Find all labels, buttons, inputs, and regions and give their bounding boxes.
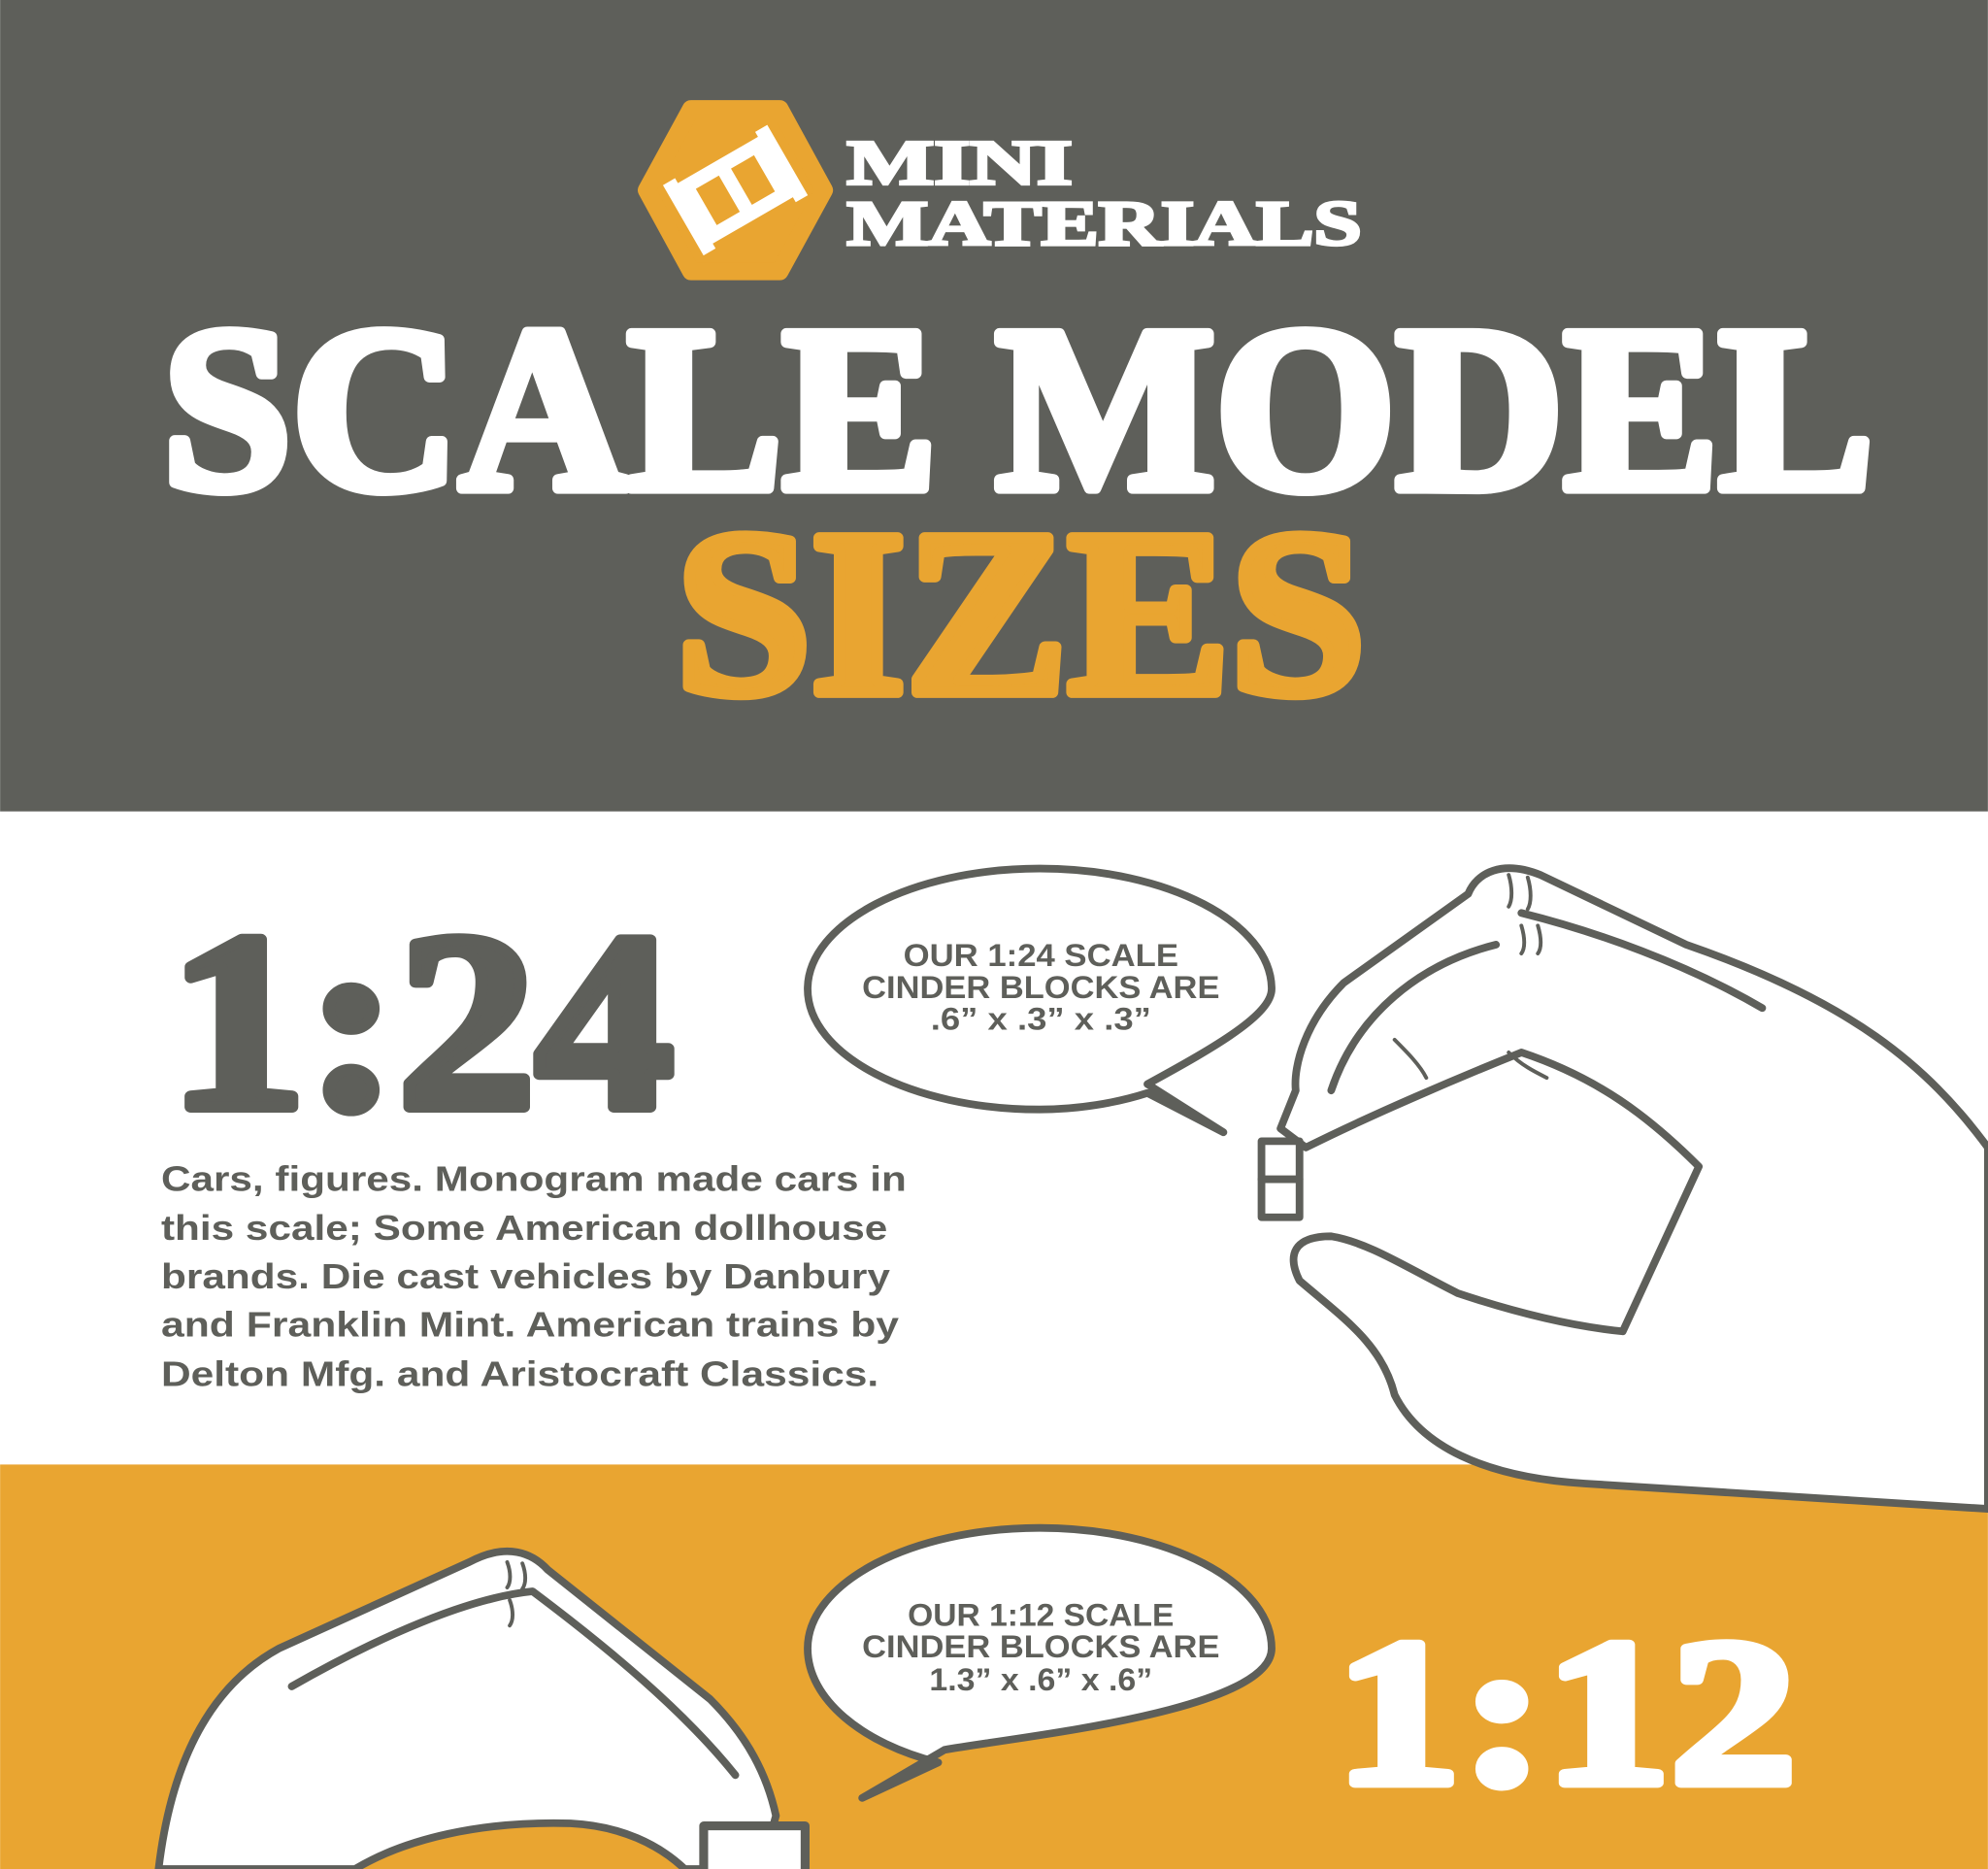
logo text: MINI <box>847 128 1073 198</box>
header background <box>0 0 1988 812</box>
hand: 1:24 <box>1262 868 1988 1509</box>
description 1:24: brands. Die cast vehicles by Danbury <box>161 1256 891 1296</box>
callout bubble 1:24: .6” x .3” x .3” <box>931 1000 1151 1036</box>
hand: 1:12 <box>158 1552 805 1869</box>
description 1:24: Delton Mfg. and Aristocraft Classics. <box>161 1353 878 1393</box>
callout bubble 1:12: 1.3” x .6” x .6” <box>929 1661 1152 1697</box>
description 1:24: this scale; Some American dollhouse <box>161 1208 887 1248</box>
icon: cinder block 1:12 <box>704 1826 805 1869</box>
logo: MATERIALS <box>847 189 1362 259</box>
icon: hexagon <box>646 109 824 271</box>
heading 1:24: 1:24 <box>169 882 674 1162</box>
callout bubble 1:24: CINDER BLOCKS ARE <box>862 969 1219 1005</box>
description 1:24: Cars, figures. Monogram made cars in <box>161 1158 907 1198</box>
white section background <box>0 812 1988 1464</box>
description 1:24 <box>161 1158 907 1393</box>
title: SCALE MODEL <box>162 279 1873 540</box>
heading 1:12: 1:12 <box>1335 1596 1797 1828</box>
callout bubble 1:12: CINDER BLOCKS ARE <box>862 1628 1219 1664</box>
logo <box>646 109 1362 271</box>
callout bubble 1:12 <box>808 1528 1272 1798</box>
callout bubble 1:24: OUR 1:24 SCALE <box>904 937 1178 973</box>
title: sizes: SIZES <box>676 483 1366 744</box>
callout bubble 1:24 <box>808 869 1272 1132</box>
description 1:24: and Franklin Mint. American trains by <box>161 1304 900 1344</box>
callout bubble 1:12: OUR 1:12 SCALE <box>908 1596 1174 1632</box>
orange section background <box>0 1464 1988 1869</box>
icon: cinder block 1:24 <box>1262 1141 1300 1218</box>
